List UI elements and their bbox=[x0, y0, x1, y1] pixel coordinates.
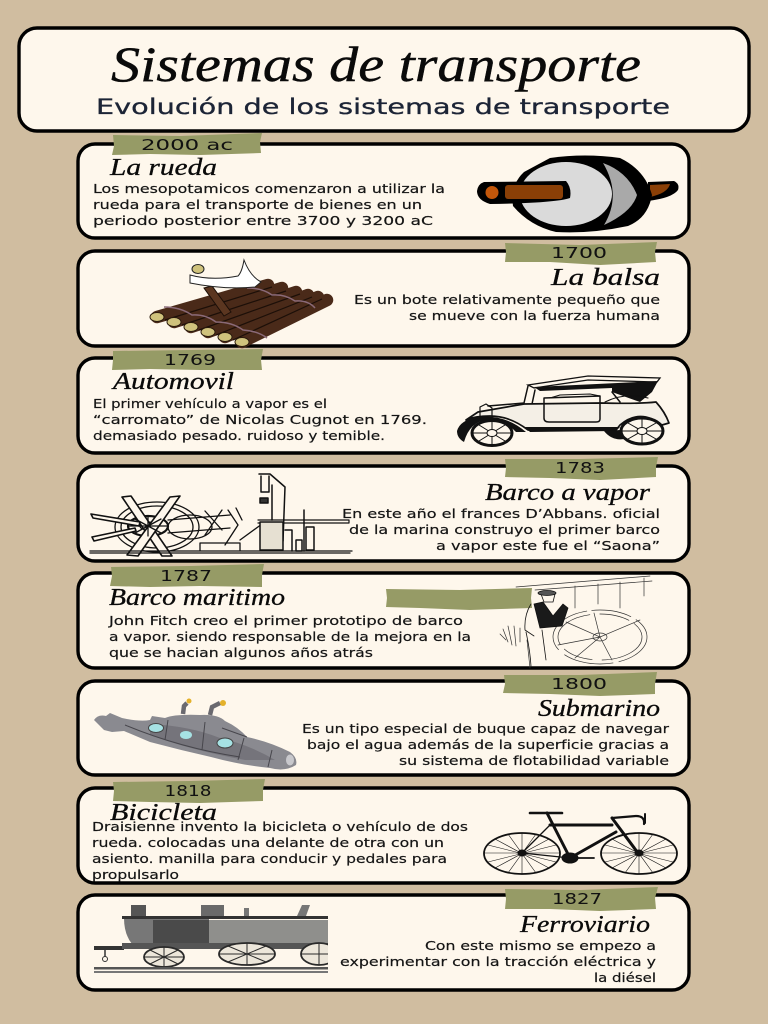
text: la rueda: rueda para el transporte de bienes en un bbox=[93, 197, 422, 212]
year tape: 1827 bbox=[505, 887, 658, 911]
text: automovil: demasiado pesado. ruidoso y temible. bbox=[93, 428, 385, 443]
text: barco a vapor: de la marina construyo el primer barco bbox=[349, 522, 660, 537]
panel: automovil bbox=[78, 349, 689, 453]
icon: paddle wheel steam engine bbox=[90, 474, 352, 556]
year tape: 1827: 1827 bbox=[552, 890, 602, 908]
text: la rueda bbox=[93, 181, 445, 228]
panel: barco a vapor bbox=[78, 457, 689, 561]
year tape: 1787: 1787 bbox=[160, 567, 212, 585]
text: barco maritimo: a vapor. siendo responsable de la mejora en la bbox=[109, 629, 471, 644]
heading: barco maritimo: Barco maritimo bbox=[109, 585, 285, 611]
text: submarino: bajo el agua además de la superficie gracias a bbox=[307, 737, 669, 752]
panel: bicicleta bbox=[78, 779, 689, 883]
year tape: 1800 bbox=[503, 672, 657, 696]
icon: bicycle bbox=[484, 813, 677, 874]
year tape: 1783: 1783 bbox=[555, 459, 605, 477]
text: barco maritimo bbox=[108, 613, 471, 660]
year tape: 1769 bbox=[112, 349, 263, 370]
text: submarino: Es un tipo especial de buque capaz de navegar bbox=[302, 721, 670, 736]
text: la balsa: se mueve con la fuerza humana bbox=[409, 308, 660, 323]
header panel bbox=[19, 28, 749, 131]
title: Sistemas de transporte bbox=[111, 36, 641, 92]
year tape: 2000 ac: 2000 ac bbox=[141, 136, 233, 154]
text: bicicleta: Draisienne invento la bicicleta o vehículo de dos bbox=[92, 819, 468, 834]
panel: submarino bbox=[78, 672, 689, 775]
panel: ferroviario bbox=[78, 887, 689, 990]
year tape: 1800: 1800 bbox=[551, 675, 607, 693]
year tape: 1700: 1700 bbox=[551, 244, 607, 262]
text: bicicleta: rueda. colocadas una delante de otra con un bbox=[92, 835, 444, 850]
text: la rueda: Los mesopotamicos comenzaron a utilizar la bbox=[93, 181, 445, 196]
text: ferroviario: la diésel bbox=[594, 970, 656, 985]
heading: ferroviario: Ferroviario bbox=[519, 912, 650, 938]
year tape: 1787 bbox=[110, 564, 264, 587]
text: ferroviario: Con este mismo se empezo a bbox=[425, 938, 656, 953]
text: bicicleta bbox=[92, 819, 468, 882]
year tape: 1818 bbox=[113, 779, 265, 803]
text: submarino: su sistema de flotabilidad variable bbox=[399, 753, 669, 768]
text: ferroviario bbox=[340, 938, 657, 985]
icon: car bbox=[457, 376, 669, 446]
heading: la rueda: La rueda bbox=[109, 155, 217, 181]
icon: locomotive bbox=[94, 905, 337, 973]
text: ferroviario: experimentar con la tracción eléctrica y bbox=[340, 954, 657, 969]
heading: bicicleta: Bicicleta bbox=[110, 800, 217, 826]
text: bicicleta: propulsarlo bbox=[92, 867, 179, 882]
icon: man at paddle wheel bbox=[500, 576, 652, 668]
blank tape bbox=[386, 588, 532, 610]
text: barco maritimo: que se hacian algunos años atrás bbox=[109, 645, 373, 660]
text: la rueda: periodo posterior entre 3700 y 3200 aC bbox=[93, 213, 433, 228]
icon: wheel bbox=[477, 156, 678, 232]
icon: submarine bbox=[94, 698, 296, 769]
year tape: 2000 ac bbox=[112, 133, 262, 155]
year tape: 1783 bbox=[505, 457, 658, 480]
text: automovil bbox=[93, 396, 427, 443]
text: la balsa: Es un bote relativamente pequeño que bbox=[354, 292, 660, 307]
panel: la balsa bbox=[78, 242, 689, 346]
heading: barco a vapor: Barco a vapor bbox=[485, 480, 651, 506]
panel: barco maritimo bbox=[78, 564, 689, 668]
text: la balsa bbox=[354, 292, 660, 323]
year tape: 1769: 1769 bbox=[164, 351, 216, 369]
text: barco a vapor bbox=[342, 506, 660, 553]
text: automovil: “carromato” de Nicolas Cugnot en 1769. bbox=[93, 412, 427, 427]
text: submarino bbox=[302, 721, 670, 768]
text: barco a vapor: a vapor este fue el “Saona” bbox=[436, 538, 660, 553]
text: barco a vapor: En este año el frances D’Abbans. oficial bbox=[342, 506, 660, 521]
subtitle: Evolución de los sistemas de transporte bbox=[96, 95, 670, 119]
text: bicicleta: asiento. manilla para conducir y pedales para bbox=[92, 851, 447, 866]
year tape: 1818: 1818 bbox=[164, 782, 212, 800]
panel: la rueda bbox=[78, 133, 689, 238]
heading: submarino: Submarino bbox=[538, 696, 660, 722]
icon: raft bbox=[150, 260, 327, 346]
year tape: 1700 bbox=[505, 242, 657, 265]
text: automovil: El primer vehículo a vapor es el bbox=[93, 396, 327, 411]
heading: automovil: Automovil bbox=[111, 369, 234, 395]
heading: la balsa: La balsa bbox=[550, 265, 660, 291]
text: barco maritimo: John Fitch creo el primer prototipo de barco bbox=[108, 613, 463, 628]
